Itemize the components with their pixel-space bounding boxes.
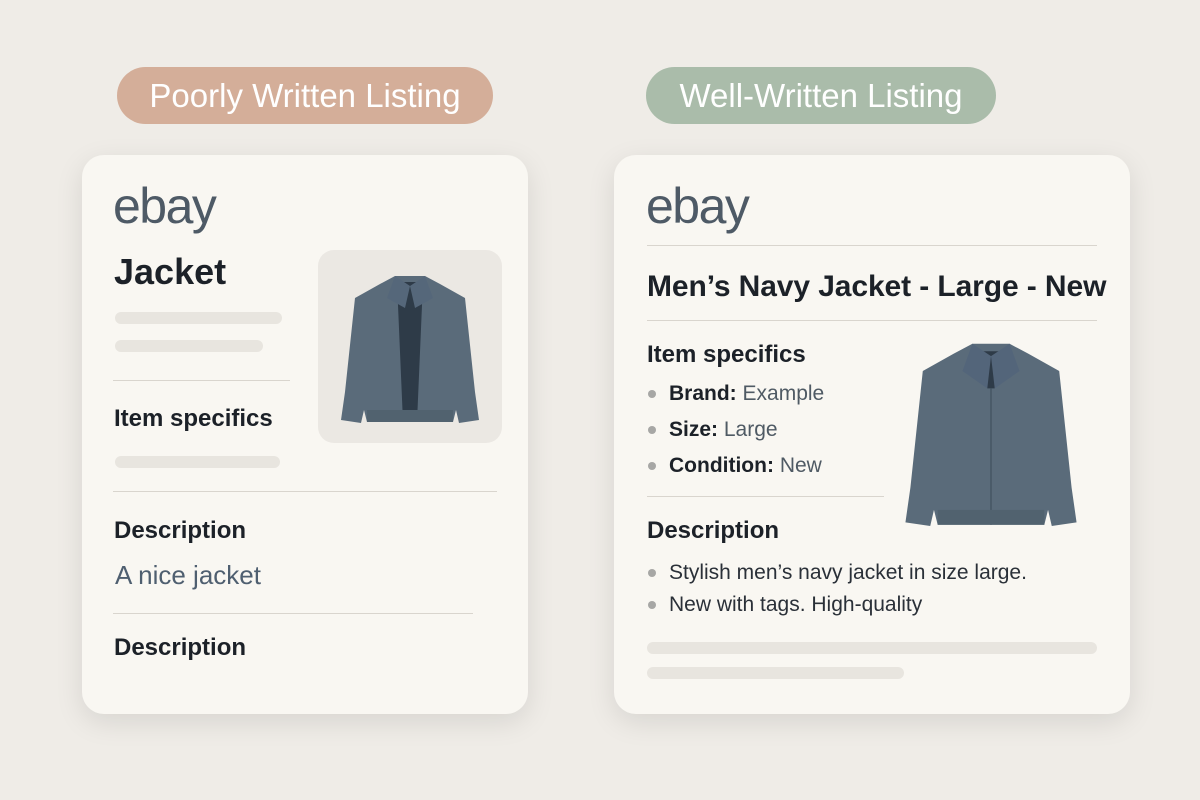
- list: description: [648, 561, 1027, 616]
- list: description: New with tags. High-quality: [669, 593, 922, 616]
- pill: poorly written listing: Poorly Written Listing: [149, 77, 461, 114]
- list: description: Stylish men’s navy jacket in size large.: [669, 561, 1027, 584]
- heading: description: Description: [647, 517, 779, 544]
- heading: Jacket: Jacket: [114, 251, 226, 292]
- heading: title: Men’s Navy Jacket - Large - New: [647, 270, 1106, 303]
- pill: well-written listing: [646, 67, 996, 124]
- panel: poor listing card: [82, 155, 528, 714]
- image: jacket: [905, 344, 1076, 526]
- heading: description 2: Description: [114, 634, 246, 661]
- image: jacket thumbnail: [318, 250, 502, 443]
- list: specifics: Size: Large: [669, 418, 778, 441]
- placeholder bars: [115, 312, 282, 352]
- heading: item specifics: Item specifics: [114, 405, 273, 432]
- heading: item specifics: Item specifics: [647, 341, 806, 368]
- pill: well-written listing: Well-Written Listing: [679, 77, 963, 114]
- placeholder bars: [647, 642, 1097, 679]
- panel: well-written listing card: [614, 155, 1130, 714]
- list: specifics: Brand: Example: [669, 382, 824, 405]
- logo: ebay: ebay: [646, 178, 748, 234]
- pill: poorly written listing: [117, 67, 493, 124]
- list: specifics: Condition: New: [669, 454, 822, 477]
- heading: description: Description: [114, 517, 246, 544]
- text: a nice jacket: A nice jacket: [115, 560, 261, 590]
- list: specifics: [648, 382, 824, 477]
- logo: ebay: ebay: [113, 178, 215, 234]
